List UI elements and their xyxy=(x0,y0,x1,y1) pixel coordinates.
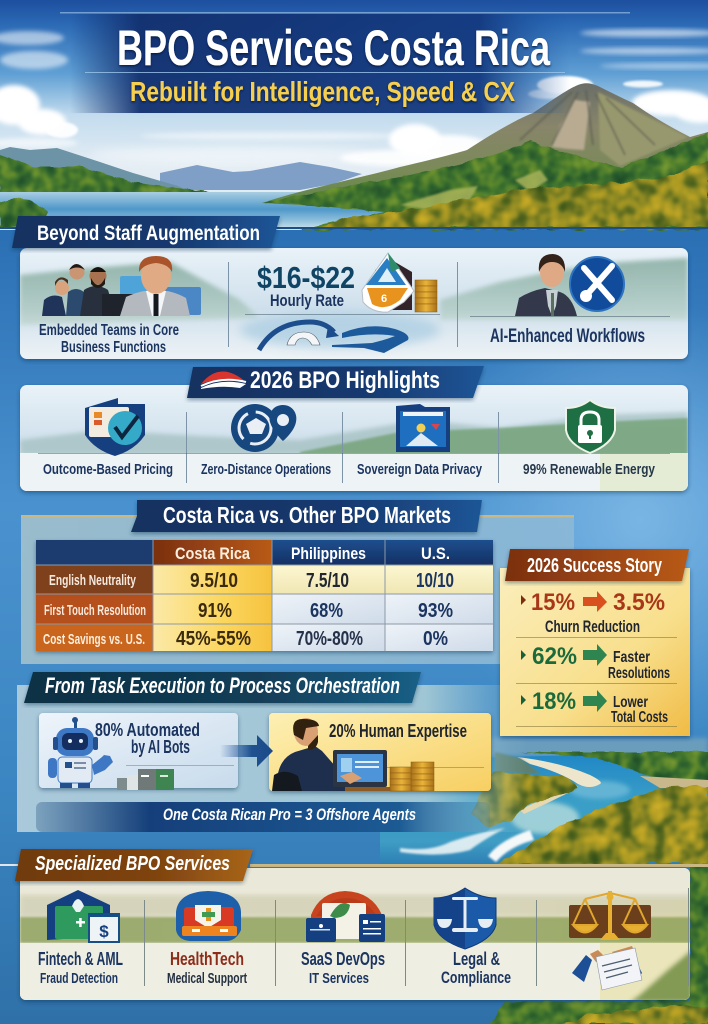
heading: specialized services: Specialized BPO Services xyxy=(35,853,230,875)
labels: highlights: Zero-Distance Operations xyxy=(201,461,331,478)
icon: person at laptop xyxy=(272,718,390,791)
panel: 2026 highlights xyxy=(20,385,688,491)
sand spit xyxy=(640,776,708,788)
icon: data folder xyxy=(396,404,450,452)
card: human expertise xyxy=(269,713,491,791)
clouds xyxy=(0,29,708,166)
forest overlapping corner xyxy=(630,950,692,1002)
text: automated: 80% Automated xyxy=(95,720,200,740)
icon: rate badge with coins xyxy=(362,253,437,312)
left hills xyxy=(0,147,190,195)
row: first touch resolution: First Touch Resolution xyxy=(44,602,146,619)
pale shallows xyxy=(511,802,579,834)
icon: professional with tools xyxy=(515,254,624,316)
sand banks xyxy=(517,757,601,787)
metric: resolutions: Faster xyxy=(613,649,650,666)
lake xyxy=(0,192,400,230)
label: saas devops: SaaS DevOps xyxy=(301,949,385,969)
metric: resolutions: Resolutions xyxy=(608,665,670,682)
panel: process orchestration xyxy=(17,685,527,832)
metric: costs: Lower xyxy=(613,694,648,711)
left forest xyxy=(470,770,576,826)
volcano xyxy=(262,83,708,230)
table header: Philippines xyxy=(291,544,366,563)
label: ai workflows: AI-Enhanced Workflows xyxy=(490,326,645,347)
labels: highlights: Sovereign Data Privacy xyxy=(357,461,482,478)
icon: legal shield xyxy=(434,888,496,949)
panel: success story xyxy=(500,549,690,736)
icon: outcome pricing shield xyxy=(85,398,145,456)
strip: one costa rican pro xyxy=(36,802,490,832)
service: healthtech xyxy=(167,891,247,987)
row: english neutrality: 10/10 xyxy=(416,570,454,592)
text: embedded teams xyxy=(39,322,179,356)
icon: gauge and arrow xyxy=(259,322,408,353)
row: first touch resolution xyxy=(36,594,493,624)
row: english neutrality: 9.5/10 xyxy=(190,570,238,592)
bottom forest xyxy=(490,864,708,1024)
heading: specialized services xyxy=(15,849,253,881)
service: fintech xyxy=(38,890,123,987)
metric: costs: Total Costs xyxy=(611,709,668,726)
row: first touch resolution: 68% xyxy=(310,600,343,622)
subtitle: Rebuilt for Intelligence, Speed & CX xyxy=(130,76,515,107)
label: saas devops: IT Services xyxy=(309,970,369,987)
label: fintech: Fintech & AML xyxy=(38,949,123,969)
heading: success story xyxy=(505,549,689,581)
title banner xyxy=(60,12,630,113)
row: cost savings: 45%-55% xyxy=(176,628,251,650)
service: legal xyxy=(434,888,511,987)
icon: team of people xyxy=(42,256,201,316)
panel: specialized services xyxy=(0,864,708,1002)
header bottom edge xyxy=(0,227,708,229)
rule xyxy=(245,314,440,315)
panel scenery xyxy=(20,412,688,491)
row: cost savings: Cost Savings vs. U.S. xyxy=(43,631,145,648)
title: BPO Services Costa Rica xyxy=(117,20,551,76)
label: legal: Compliance xyxy=(441,968,511,987)
heading: beyond staff augmentation xyxy=(12,216,280,248)
far right forest xyxy=(520,752,708,782)
table header xyxy=(36,540,493,565)
icon: healthtech xyxy=(176,891,241,941)
icon: location cycle xyxy=(231,404,296,452)
label: healthtech: Medical Support xyxy=(167,970,247,987)
metric: churn: 15% xyxy=(531,589,575,616)
row: cost savings: 70%-80% xyxy=(296,628,363,650)
header landscape xyxy=(0,0,708,230)
table header: Costa Rica xyxy=(175,544,250,563)
heading: 2026 bpo highlights xyxy=(187,366,484,398)
label: saas devops xyxy=(301,949,385,987)
labels: highlights xyxy=(43,461,656,478)
table header: U.S. xyxy=(421,544,450,563)
comparison table xyxy=(36,540,493,651)
icon: robot xyxy=(48,717,113,788)
heading: comparison xyxy=(131,500,482,532)
metric: churn: Churn Reduction xyxy=(545,617,640,636)
volcano faces xyxy=(520,90,688,166)
text: automated xyxy=(95,720,200,757)
heading: comparison: Costa Rica vs. Other BPO Markets xyxy=(163,502,451,528)
panel scenery xyxy=(20,258,688,348)
icon: flag swoosh xyxy=(201,371,246,389)
row: english neutrality: English Neutrality xyxy=(49,572,136,589)
left tree xyxy=(0,198,48,228)
labels: highlights: Outcome-Based Pricing xyxy=(43,461,173,478)
sunlit foliage xyxy=(312,160,708,228)
label: fintech xyxy=(38,949,123,987)
text: embedded teams: Business Functions xyxy=(61,339,166,356)
distant mountains xyxy=(160,162,362,190)
panel scenery xyxy=(20,868,692,1002)
page background xyxy=(0,228,708,1024)
table grid xyxy=(36,540,493,651)
heading: process orchestration xyxy=(24,672,421,703)
light green clearings xyxy=(400,170,548,210)
arrow: automation to human xyxy=(220,735,273,767)
heading: process orchestration: From Task Execution to Process Orchestration xyxy=(45,673,400,698)
hourly rate: $16-$22 xyxy=(257,260,355,295)
panel: beyond staff augmentation xyxy=(20,248,688,359)
text: automated: by AI Bots xyxy=(131,737,190,757)
card: automated xyxy=(39,713,238,790)
label: legal xyxy=(441,949,511,987)
row: first touch resolution: 91% xyxy=(198,600,232,622)
row: english neutrality: 7.5/10 xyxy=(306,570,349,592)
label: legal: Legal & xyxy=(453,949,500,969)
hourly rate xyxy=(257,260,355,310)
icon: rate badge with coins: 6 xyxy=(381,293,387,305)
metric: churn: 3.5% xyxy=(613,589,665,616)
text: human expertise: 20% Human Expertise xyxy=(329,721,467,741)
icon: server stacks xyxy=(117,769,174,790)
river landscape xyxy=(380,738,708,864)
metric: resolutions xyxy=(521,643,670,682)
label: healthtech: HealthTech xyxy=(170,949,244,969)
heading: 2026 bpo highlights: 2026 BPO Highlights xyxy=(250,367,440,394)
labels: highlights: 99% Renewable Energy xyxy=(523,461,656,478)
label: fintech: Fraud Detection xyxy=(40,970,118,987)
background glow xyxy=(420,300,708,740)
row: first touch resolution: 93% xyxy=(418,600,453,622)
icon: contract handshake xyxy=(572,946,642,990)
metric: costs: 18% xyxy=(532,688,576,715)
icon: green lock shield xyxy=(566,400,615,453)
row: english neutrality xyxy=(36,565,493,594)
label: healthtech xyxy=(167,949,247,987)
volcano forest xyxy=(262,132,708,230)
icon: coin stacks xyxy=(390,762,434,791)
strip: one costa rican pro: One Costa Rican Pro = 3 Offshore Agents xyxy=(163,805,416,824)
panel: comparison xyxy=(21,515,574,664)
background hill xyxy=(495,752,541,774)
text: embedded teams: Embedded Teams in Core xyxy=(39,322,179,339)
hourly rate: Hourly Rate xyxy=(270,291,344,310)
heading: beyond staff augmentation: Beyond Staff Augmentation xyxy=(37,222,260,245)
rule xyxy=(470,316,670,317)
metric: costs xyxy=(521,688,668,726)
metric: churn xyxy=(521,589,665,636)
service: saas devops xyxy=(301,891,385,987)
foam xyxy=(400,828,534,862)
row: cost savings: 0% xyxy=(423,628,448,650)
icon: fintech: $ xyxy=(99,922,109,941)
metric: resolutions: 62% xyxy=(532,643,577,670)
icon: saas devops xyxy=(306,891,385,942)
right forest xyxy=(497,786,708,864)
icon: scales of justice xyxy=(569,891,651,940)
row: cost savings xyxy=(36,624,493,651)
